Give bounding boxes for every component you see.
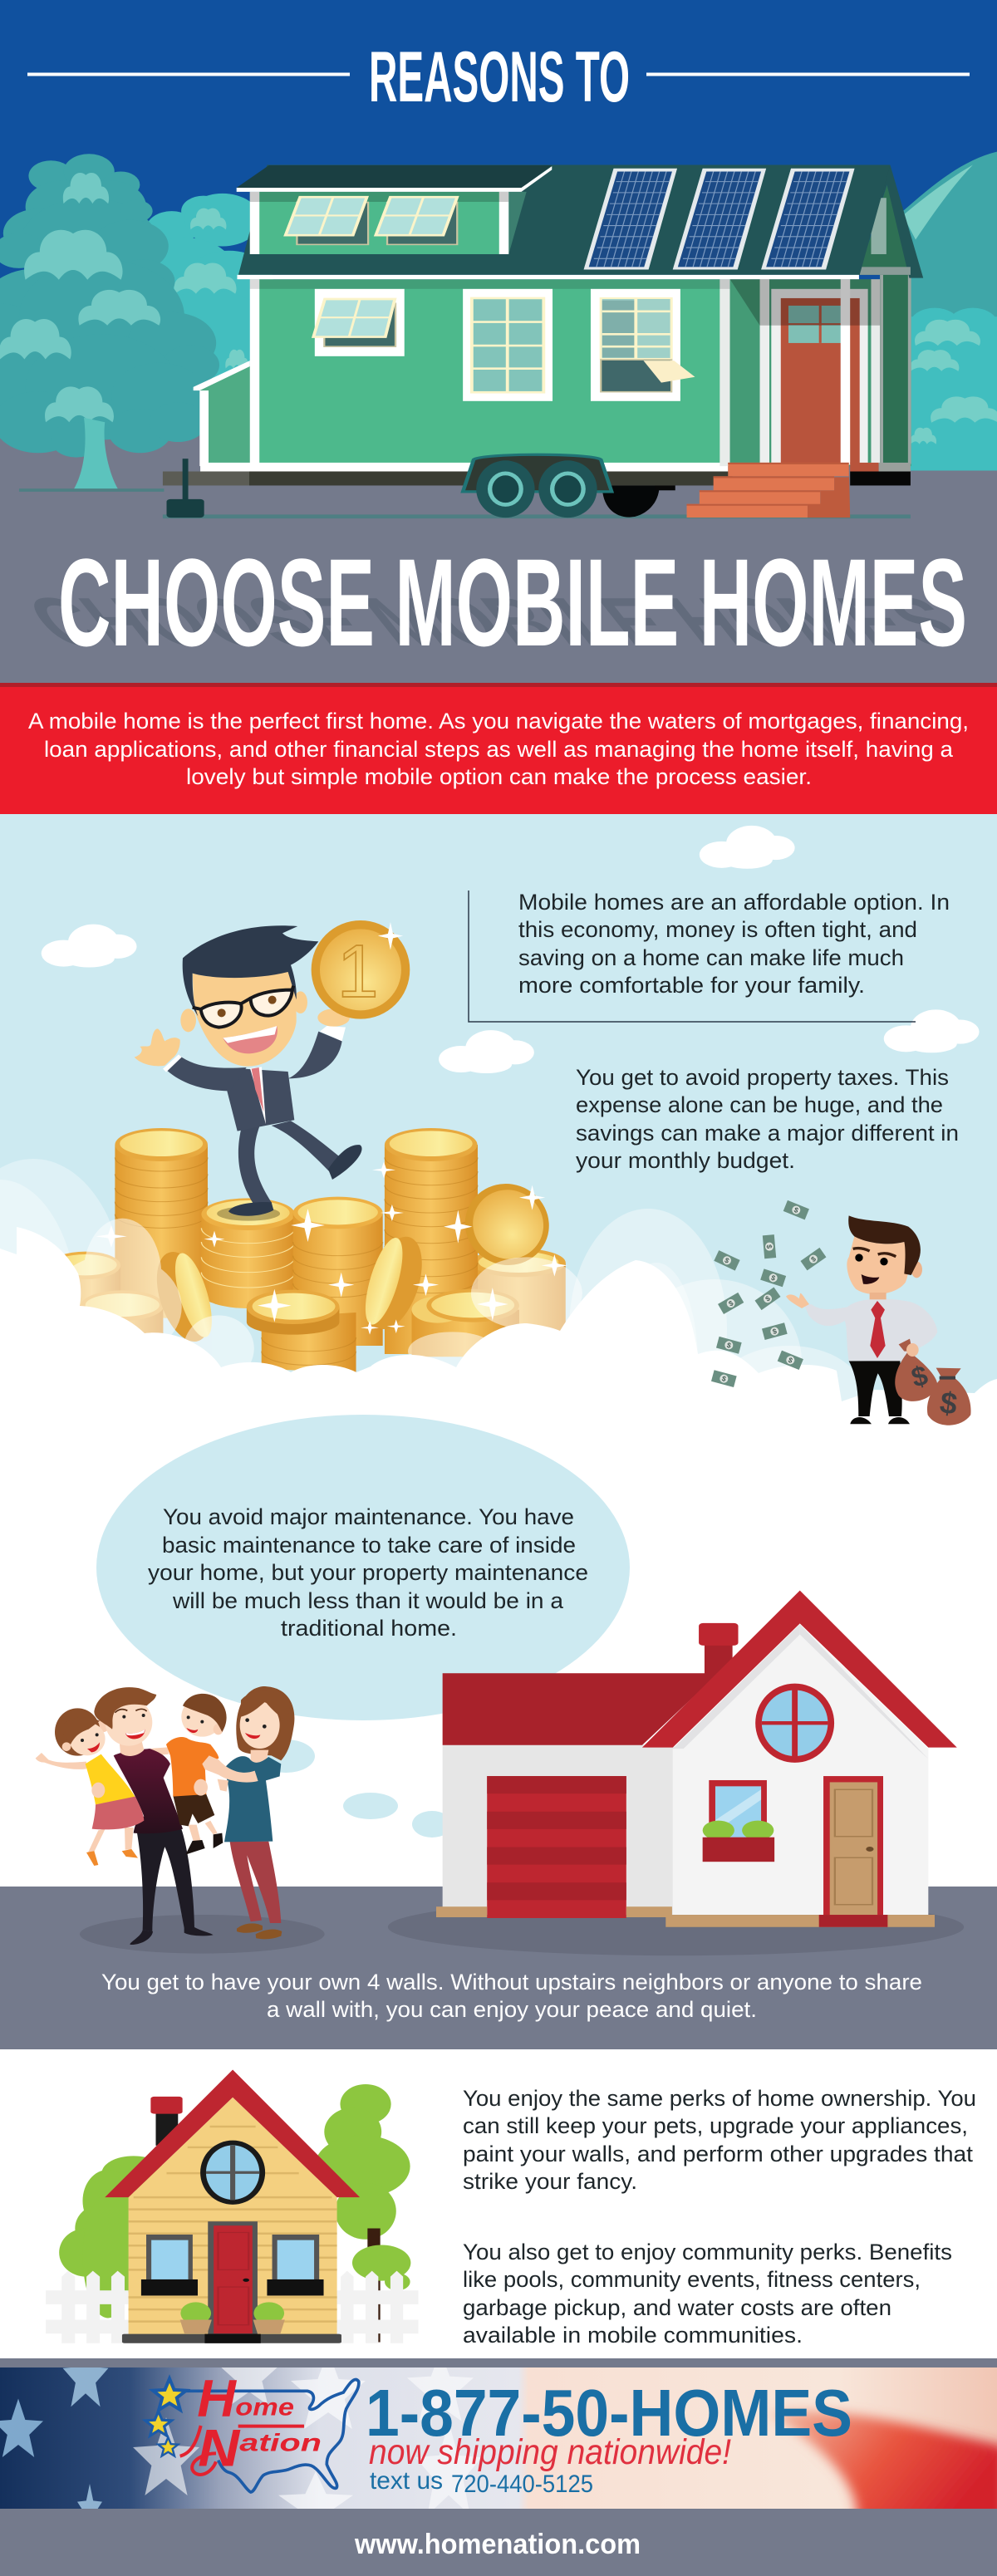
own four walls text: You get to have your own 4 walls. Without upstairs neighbors or anyone to share: [101, 1970, 922, 1995]
speech bubble: [96, 1415, 630, 1838]
hands: [135, 1008, 350, 1066]
garage roof: [443, 1673, 719, 1745]
banner background: [0, 2367, 997, 2509]
dormer: [237, 165, 552, 254]
intro background: [0, 683, 997, 814]
intro stripe: [0, 683, 997, 687]
stacks left: [50, 1252, 164, 1340]
hair: [183, 925, 318, 1016]
flag red stripe: [769, 2411, 997, 2525]
stack back left: [115, 1128, 208, 1318]
affordable copy: Mobile homes are an affordable option. In: [518, 890, 950, 915]
stack centre: [293, 1197, 383, 1346]
logo: [145, 2369, 359, 2492]
ground: [0, 1887, 997, 2049]
legs: [238, 1121, 341, 1206]
panel: savings: [0, 814, 997, 1462]
hero sky: [0, 0, 997, 449]
boy: [166, 1694, 227, 1855]
falling banknotes: $: [726, 1341, 732, 1350]
money bag small: [927, 1368, 971, 1425]
panel: hero: [0, 0, 997, 683]
foreground tree: [0, 154, 219, 458]
map outline: [185, 2380, 359, 2492]
left window: [141, 2235, 198, 2295]
main roof: [238, 165, 890, 275]
mother: [202, 1686, 294, 1939]
base: [122, 2334, 341, 2343]
tree shadow: [19, 488, 164, 492]
gable roof: [642, 1591, 957, 1748]
yellow house scene: [46, 2070, 419, 2343]
gable wall: [673, 1624, 928, 1915]
maintenance text: basic maintenance to take care of inside: [162, 1533, 576, 1558]
trailer frame: [163, 463, 911, 485]
family shadow: [80, 1915, 325, 1954]
falling banknotes: $: [724, 1256, 730, 1265]
fence: [46, 2271, 419, 2343]
intro text: loan applications, and other financial steps as well as managing the home itself, having a: [44, 737, 954, 762]
sky: [0, 814, 997, 1429]
stack far right: [471, 1249, 566, 1362]
sparkles on coins: [96, 1161, 567, 1335]
stack front right: [412, 1289, 519, 1357]
panel: banner: [0, 2367, 997, 2509]
window 1: [313, 289, 405, 356]
intro text: lovely but simple mobile option can make the process easier.: [186, 764, 812, 789]
father legs: [130, 1829, 214, 1945]
shirt and tie: [250, 1067, 266, 1124]
round window: [755, 1684, 834, 1763]
falling banknotes: $: [721, 1374, 727, 1383]
father arm to boy: [150, 1747, 169, 1755]
maintenance text: will be much less than it would be in a: [172, 1588, 564, 1613]
stack man stands on: [201, 1198, 295, 1308]
ground line: [163, 514, 911, 518]
panel: maintenance: [0, 1415, 997, 2049]
gable: [852, 165, 923, 278]
panel: intro: [0, 683, 997, 814]
upright coin left: [147, 1249, 220, 1345]
text: property taxes: [576, 1065, 959, 1173]
perks text: can still keep your pets, upgrade your appliances,: [463, 2113, 968, 2138]
bracket rule: [469, 891, 916, 1022]
text: property taxes: You get to avoid property taxes. This: [576, 1065, 949, 1090]
garage door: [487, 1776, 626, 1918]
small window: [703, 1780, 774, 1862]
panel: perks: [46, 2070, 976, 2348]
trailer wheels: [463, 454, 611, 518]
community text: [463, 2240, 952, 2348]
falling banknotes: $: [727, 1298, 734, 1308]
spare wheel: [602, 485, 675, 518]
logo wordmark: ome: [235, 2394, 294, 2421]
round window: [200, 2141, 265, 2205]
money bag large: $: [908, 1360, 931, 1394]
house wall: [200, 279, 731, 472]
shoes: [228, 1145, 362, 1216]
stack back right: [385, 1128, 478, 1354]
hill: [903, 152, 997, 470]
falling banknotes: [711, 1200, 826, 1387]
face: [180, 965, 307, 1067]
foundation: [436, 1906, 935, 1927]
shipping tagline: now shipping nationwide!: [369, 2432, 731, 2472]
family: [36, 1686, 325, 1954]
intro text: A mobile home is the perfect first home. As you navigate the waters of mortgages, financing,: [28, 709, 969, 734]
falling banknotes: $: [772, 1327, 778, 1336]
falling banknotes: $: [793, 1205, 800, 1214]
maintenance text: You avoid major maintenance. You have: [163, 1504, 574, 1529]
heading: reasons to: REASONS TO: [369, 37, 630, 117]
text: property taxes: your monthly budget.: [576, 1148, 795, 1173]
planters: [180, 2302, 285, 2333]
back cloud haze: [0, 1159, 864, 1462]
logo wordmark: [180, 2369, 322, 2477]
glasses: [193, 986, 293, 1028]
maintenance text: your home, but your property maintenance: [148, 1560, 588, 1585]
jacket: [165, 1032, 342, 1131]
figure: man holding coin: [135, 920, 410, 1216]
chimney: [699, 1623, 739, 1677]
dormer window 1: [286, 197, 368, 244]
right bushes: [909, 308, 997, 470]
flag stars: [0, 2367, 480, 2509]
perks text: strike your fancy.: [463, 2169, 637, 2194]
perks text: [463, 2086, 976, 2194]
falling banknotes: $: [787, 1356, 794, 1365]
cuffs: [163, 1026, 346, 1072]
father head: [94, 1687, 156, 1756]
text: affordable option: [469, 890, 950, 1022]
window 2: [463, 289, 553, 401]
hitch jack: [167, 459, 204, 518]
text: property taxes: expense alone can be huge, and the: [576, 1092, 943, 1117]
own four walls text: [101, 1970, 922, 2022]
community text: available in mobile communities.: [463, 2323, 803, 2348]
community text: garbage pickup, and water costs are often: [463, 2295, 891, 2320]
affordable copy: [518, 890, 950, 998]
garage wall: [443, 1744, 674, 1915]
porch: [730, 272, 911, 466]
logo stars: [145, 2378, 186, 2456]
money bag large: [895, 1339, 937, 1401]
affordable copy: saving on a home can make life much: [518, 945, 904, 970]
girl: [36, 1708, 144, 1866]
background tree: [134, 194, 280, 435]
heading: reasons to: [27, 37, 970, 117]
community text: You also get to enjoy community perks. Benefits: [463, 2240, 952, 2264]
maintenance text: traditional home.: [281, 1616, 457, 1641]
affordable copy: this economy, money is often tight, and: [518, 917, 917, 942]
logo wordmark: ation: [239, 2430, 322, 2457]
tree trunk: [73, 418, 119, 490]
affordable copy: more comfortable for your family.: [518, 973, 865, 998]
website url: www.homenation.com: [354, 2529, 641, 2560]
house shadow: [388, 1898, 964, 1955]
shirt: [804, 1298, 937, 1361]
upright coin far right: [462, 1182, 552, 1267]
head: [847, 1215, 922, 1299]
red house: [388, 1591, 964, 1955]
perks text: You enjoy the same perks of home ownership. You: [463, 2086, 976, 2111]
text number: 720-440-5125: [451, 2471, 593, 2498]
trousers: [849, 1360, 910, 1424]
money bag small: $: [938, 1385, 960, 1421]
coin with number one: [312, 920, 410, 1019]
maintenance text: [148, 1504, 588, 1641]
footer band: [0, 2358, 997, 2576]
tiny house scene: [0, 152, 997, 518]
figure: man throwing money: [711, 1200, 971, 1425]
community text: like pools, community events, fitness centers,: [463, 2267, 921, 2292]
foreground cloud: [0, 1227, 997, 1429]
text: property taxes: savings can make a major different in: [576, 1121, 959, 1146]
falling banknotes: $: [809, 1254, 818, 1263]
mouth: [223, 1026, 277, 1053]
logo wordmark: N: [198, 2419, 241, 2477]
door: [823, 1776, 883, 1915]
hand: [786, 1293, 809, 1308]
perks text: paint your walls, and perform other upgrades that: [463, 2142, 974, 2166]
translucent cloud over coins: [48, 1219, 582, 1381]
clouds: [42, 826, 980, 1073]
hero ground: [0, 432, 997, 683]
tie: [870, 1301, 886, 1358]
coin stacks: [48, 1128, 582, 1381]
chimney: [150, 2097, 183, 2146]
house wall: [129, 2098, 337, 2334]
window 3: [591, 289, 695, 401]
phone number: 1-877-50-HOMES: [366, 2376, 852, 2450]
door: [208, 2221, 258, 2334]
dormer window 2: [376, 197, 457, 244]
right window: [267, 2235, 324, 2295]
stack front centre: [247, 1290, 356, 1372]
trees: [59, 2084, 410, 2343]
intro text: [28, 709, 969, 789]
father torso: [114, 1749, 183, 1833]
solar panels: [584, 169, 855, 270]
falling banknotes: $: [765, 1244, 774, 1249]
logo wordmark: H: [197, 2369, 237, 2427]
upright coin right: [357, 1233, 431, 1332]
porch stairs: [687, 463, 850, 518]
roof: [105, 2070, 360, 2197]
eave: [237, 275, 859, 279]
own four walls text: a wall with, you can enjoy your peace and quiet.: [267, 1997, 757, 2022]
falling banknotes: $: [764, 1294, 772, 1303]
falling banknotes: $: [770, 1273, 777, 1283]
lean-to shed: [194, 361, 251, 466]
coin with number one: 1: [337, 930, 379, 1013]
text us: text us: [370, 2467, 443, 2495]
